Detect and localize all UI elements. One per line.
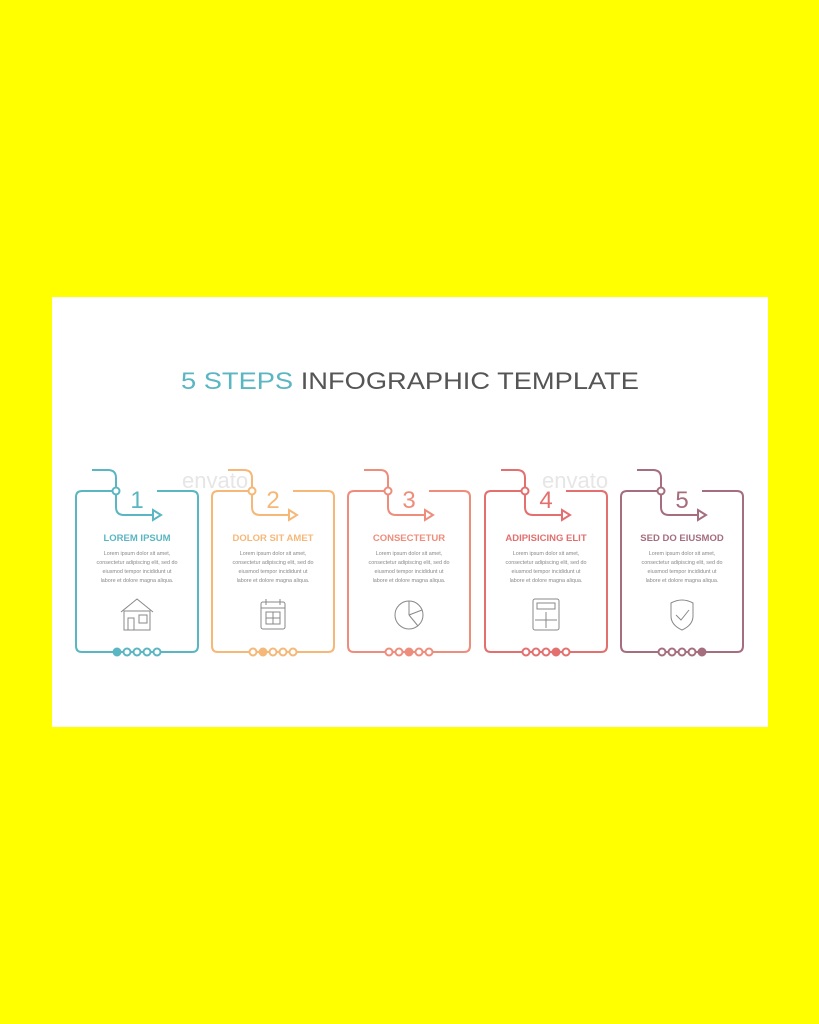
step 3: [348, 470, 470, 656]
step 1: Lorem ipsum dolor sit amet,: [104, 551, 171, 557]
step 5: [621, 470, 743, 656]
icon: shield check: [671, 600, 693, 630]
step 1: 1: [130, 487, 144, 514]
step 1: [76, 470, 198, 656]
icon: pie chart: [395, 601, 423, 629]
step 4: ADIPISICING ELIT: [505, 533, 587, 544]
step 2: eiusmod tempor incididunt ut: [239, 569, 308, 575]
watermark: [182, 468, 608, 493]
step 3: consectetur adipiscing elit, sed do: [369, 560, 449, 566]
watermark: envato: [182, 468, 248, 493]
step 3: labore et dolore magna aliqua.: [373, 578, 445, 584]
step 5: Lorem ipsum dolor sit amet,: [649, 551, 716, 557]
step 4: 4: [539, 487, 553, 514]
step 5: eiusmod tempor incididunt ut: [648, 569, 717, 575]
step 4: eiusmod tempor incididunt ut: [512, 569, 581, 575]
step 1: LOREM IPSUM: [103, 533, 171, 544]
step 3: 3: [402, 487, 416, 514]
step 3: eiusmod tempor incididunt ut: [375, 569, 444, 575]
panel: infographic card: [52, 297, 768, 727]
step 3: CONSECTETUR: [373, 533, 445, 544]
step 2: consectetur adipiscing elit, sed do: [233, 560, 313, 566]
step 5: consectetur adipiscing elit, sed do: [642, 560, 722, 566]
step 1: eiusmod tempor incididunt ut: [103, 569, 172, 575]
step 2: 2: [266, 487, 280, 514]
step 4: consectetur adipiscing elit, sed do: [506, 560, 586, 566]
watermark: envato: [542, 468, 608, 493]
step 4: [485, 470, 607, 656]
step 5: SED DO EIUSMOD: [640, 533, 724, 544]
step 2: Lorem ipsum dolor sit amet,: [240, 551, 307, 557]
icon: house: [121, 599, 153, 630]
step 1: labore et dolore magna aliqua.: [101, 578, 173, 584]
step 2: labore et dolore magna aliqua.: [237, 578, 309, 584]
step 3: Lorem ipsum dolor sit amet,: [376, 551, 443, 557]
step 1: consectetur adipiscing elit, sed do: [97, 560, 177, 566]
step 2: DOLOR SIT AMET: [233, 533, 314, 544]
step 2: [212, 470, 334, 656]
step 4: labore et dolore magna aliqua.: [510, 578, 582, 584]
step 5: labore et dolore magna aliqua.: [646, 578, 718, 584]
step 4: Lorem ipsum dolor sit amet,: [513, 551, 580, 557]
icon: calendar: [261, 599, 285, 629]
title: 5 STEPS INFOGRAPHIC TEMPLATE: [181, 368, 639, 395]
step 5: 5: [675, 487, 689, 514]
icon: calculator: [533, 599, 559, 630]
